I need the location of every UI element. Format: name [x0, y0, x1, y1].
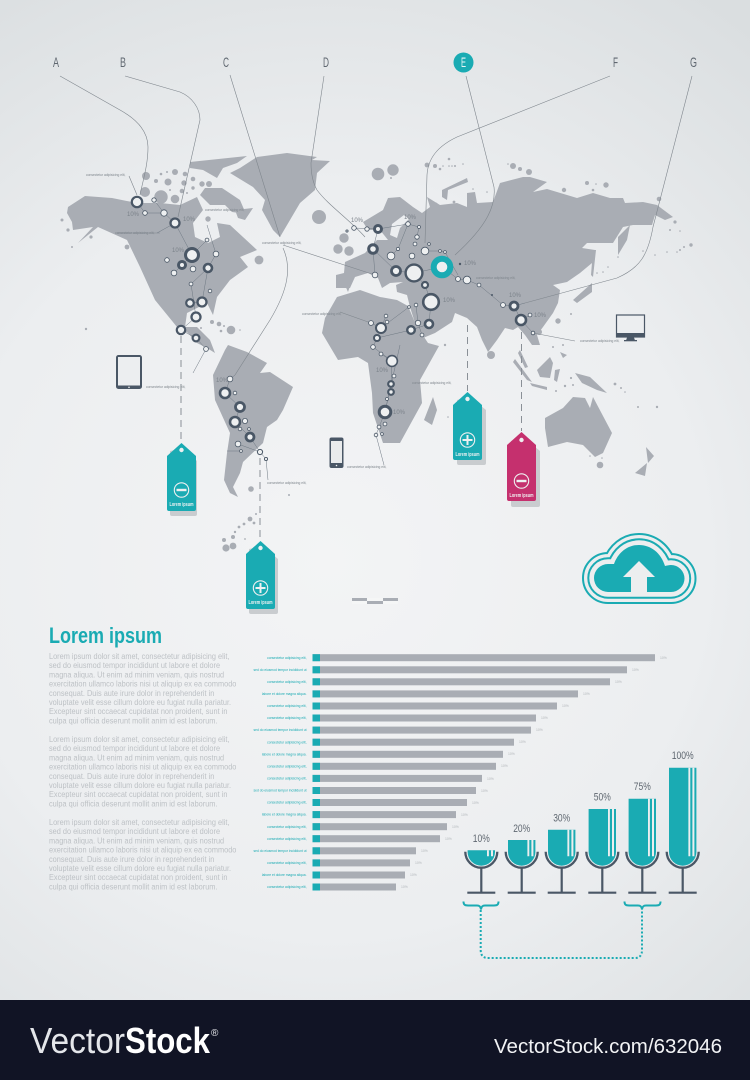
- heading: Lorem ipsum: [49, 623, 162, 648]
- glass chart: [465, 750, 699, 893]
- glass 100%: 100%: [672, 750, 694, 762]
- horizontal bar chart: 10%: [501, 764, 508, 768]
- horizontal bar chart: consectetur adipisicing elit,: [267, 825, 307, 829]
- map labels: consectetur adipisicing elit,: [115, 231, 154, 235]
- network links: [137, 200, 533, 480]
- tag: minus left: [167, 443, 197, 516]
- text block 1: magna aliqua. Ut enim ad minim veniam, quis nostrud: [49, 670, 224, 680]
- tag: minus magenta: [507, 432, 540, 507]
- text block 3: voluptate velit esse cillum dolore eu fugiat nulla pariatur.: [49, 864, 231, 873]
- text block 1: exercitation ullamco laboris nisi ut aliquip ex ea commodo: [49, 679, 237, 689]
- map labels: consectetur adipisicing elit,: [302, 312, 341, 316]
- map labels: 10%: [172, 248, 185, 254]
- leader lines A to G: [60, 75, 692, 375]
- map labels: 10%: [404, 215, 417, 221]
- map labels: 10%: [393, 410, 406, 416]
- scale bar: [352, 598, 398, 604]
- text block 3: magna aliqua. Ut enim ad minim veniam, quis nostrud: [49, 836, 224, 846]
- horizontal bar chart: consectetur adipisicing elit,: [267, 680, 307, 684]
- text block 2: exercitation ullamco laboris nisi ut aliquip ex ea commodo: [49, 762, 237, 772]
- map labels: consectetur adipisicing elit,: [267, 481, 306, 485]
- horizontal bar chart: 10%: [487, 777, 494, 781]
- column letters: D: [323, 54, 329, 70]
- text block 3: consequat. Duis aute irure dolor in reprehenderit in: [49, 854, 214, 864]
- world map: [60, 153, 693, 552]
- text block 2: Lorem ipsum dolor sit amet, consectetur adipisicing elit,: [49, 735, 229, 744]
- map labels: 10%: [376, 368, 389, 374]
- glass 75%: 75%: [634, 781, 651, 793]
- bracket connector: [464, 902, 660, 958]
- horizontal bar chart: consectetur adipisicing elit,: [267, 764, 307, 768]
- horizontal bar chart: sed do eiusmod tempor incididunt ut: [254, 789, 307, 793]
- horizontal bar chart: 10%: [461, 813, 468, 817]
- column letters: [53, 52, 697, 72]
- horizontal bar chart: consectetur adipisicing elit,: [267, 656, 307, 660]
- horizontal bar chart: 10%: [632, 668, 639, 672]
- tag: plus lower: Lorem ipsum: [248, 600, 273, 606]
- horizontal bar chart: [254, 654, 667, 890]
- column letters: A: [53, 54, 59, 70]
- islands of Asia and Madagascar: [344, 178, 630, 425]
- icon: cloud upload: [594, 545, 684, 592]
- text block 1: culpa qui officia deserunt mollit anim id est laborum.: [49, 716, 217, 726]
- horizontal bar chart: 10%: [583, 692, 590, 696]
- Eurasia: [336, 177, 673, 352]
- horizontal bar chart: 10%: [541, 716, 548, 720]
- map labels: 10%: [127, 212, 140, 218]
- glass 10%: 10%: [473, 833, 490, 845]
- North America: [67, 196, 257, 353]
- map labels: consectetur adipisicing elit,: [86, 173, 125, 177]
- horizontal bar chart: 10%: [401, 885, 408, 889]
- horizontal bar chart: consectetur adipisicing elit,: [267, 801, 307, 805]
- horizontal bar chart: sed do eiusmod tempor incididunt ut: [254, 849, 307, 853]
- tag: minus left: Lorem ipsum: [170, 502, 194, 508]
- text block 2: magna aliqua. Ut enim ad minim veniam, quis nostrud: [49, 753, 224, 763]
- horizontal bar chart: consectetur adipisicing elit,: [267, 740, 307, 744]
- highlighted node: [434, 259, 450, 275]
- column letters: F: [613, 54, 618, 70]
- horizontal bar chart: 10%: [519, 740, 526, 744]
- map scatter dots: [60, 158, 693, 552]
- map labels: consectetur adipisicing elit,: [146, 385, 185, 389]
- horizontal bar chart: sed do eiusmod tempor incididunt ut: [254, 668, 307, 672]
- horizontal bar chart: 10%: [536, 728, 543, 732]
- text block 3: exercitation ullamco laboris nisi ut aliquip ex ea commodo: [49, 845, 237, 855]
- text block 2: Excepteur sint occaecat cupidatat non proident, sunt in: [49, 790, 227, 799]
- icon: tablet: [116, 355, 142, 389]
- tag: plus Africa: [453, 392, 486, 465]
- glass 30%: 30%: [553, 812, 570, 824]
- map labels: 10%: [443, 298, 456, 304]
- horizontal bar chart: 10%: [562, 704, 569, 708]
- horizontal bar chart: labore et dolore magna aliqua.: [262, 873, 307, 877]
- South America: [213, 345, 293, 497]
- column letters: G: [690, 54, 697, 70]
- map labels: consectetur adipisicing elit,: [205, 208, 244, 212]
- text block 2: consequat. Duis aute irure dolor in reprehenderit in: [49, 771, 214, 781]
- horizontal bar chart: consectetur adipisicing elit,: [267, 776, 307, 780]
- text block 2: culpa qui officia deserunt mollit anim id est laborum.: [49, 799, 217, 809]
- footer bar: [0, 1000, 750, 1080]
- horizontal bar chart: 10%: [508, 752, 515, 756]
- map labels: [86, 173, 619, 485]
- text block 1: Lorem ipsum dolor sit amet, consectetur adipisicing elit,: [49, 652, 229, 661]
- glass 20%: 20%: [513, 823, 530, 835]
- horizontal bar chart: 10%: [481, 789, 488, 793]
- glass 75%: [626, 781, 658, 893]
- map labels: consectetur adipisicing elit,: [580, 339, 619, 343]
- map labels: 10%: [351, 218, 364, 224]
- horizontal bar chart: consectetur adipisicing elit,: [267, 704, 307, 708]
- column letters: B: [120, 54, 126, 70]
- text block 1: consequat. Duis aute irure dolor in reprehenderit in: [49, 688, 214, 698]
- map labels: 10%: [464, 261, 477, 267]
- tag: minus magenta: Lorem ipsum: [510, 493, 534, 499]
- icon: phone: [330, 438, 344, 468]
- text block 1: Excepteur sint occaecat cupidatat non proident, sunt in: [49, 707, 227, 716]
- horizontal bar chart: 10%: [660, 656, 667, 660]
- map labels: consectetur adipisicing elit,: [476, 276, 515, 280]
- map labels: consectetur adipisicing elit,: [262, 241, 301, 245]
- horizontal bar chart: consectetur adipisicing elit,: [267, 716, 307, 720]
- text block 2: voluptate velit esse cillum dolore eu fugiat nulla pariatur.: [49, 781, 231, 790]
- text block 3: culpa qui officia deserunt mollit anim id est laborum.: [49, 882, 217, 892]
- footer bar: ®: [211, 1028, 219, 1039]
- glass 20%: [506, 823, 538, 893]
- text block 1: sed do eiusmod tempor incididunt ut labore et dolore: [49, 661, 221, 670]
- horizontal bar chart: 10%: [452, 825, 459, 829]
- column letters: C: [223, 54, 229, 70]
- dashed tag connectors: [181, 325, 522, 540]
- text block 3: Excepteur sint occaecat cupidatat non proident, sunt in: [49, 873, 227, 882]
- footer bar: Vector: [30, 1020, 125, 1061]
- horizontal bar chart: 10%: [445, 837, 452, 841]
- tag: plus Africa: Lorem ipsum: [456, 452, 480, 458]
- tag: plus lower: [246, 541, 278, 614]
- map labels: 10%: [534, 313, 547, 319]
- horizontal bar chart: labore et dolore magna aliqua.: [262, 692, 307, 696]
- horizontal bar chart: consectetur adipisicing elit,: [267, 885, 307, 889]
- Australia and New Zealand: [545, 397, 654, 476]
- horizontal bar chart: labore et dolore magna aliqua.: [262, 813, 307, 817]
- horizontal bar chart: labore et dolore magna aliqua.: [262, 752, 307, 756]
- horizontal bar chart: 10%: [415, 861, 422, 865]
- Arctic islands and Greenland: [190, 153, 330, 237]
- glass 50%: [586, 792, 618, 893]
- map labels: consectetur adipisicing elit,: [347, 465, 386, 469]
- map labels: consectetur adipisicing elit,: [412, 381, 451, 385]
- horizontal bar chart: 10%: [472, 801, 479, 805]
- horizontal bar chart: 10%: [410, 873, 417, 877]
- Africa: [322, 290, 439, 443]
- text block 3: Lorem ipsum dolor sit amet, consectetur adipisicing elit,: [49, 818, 229, 827]
- column letters: E: [461, 54, 466, 70]
- glass 30%: [546, 812, 578, 893]
- footer bar: Stock: [125, 1020, 211, 1061]
- horizontal bar chart: consectetur adipisicing elit,: [267, 861, 307, 865]
- horizontal bar chart: 10%: [615, 680, 622, 684]
- text block 1: voluptate velit esse cillum dolore eu fugiat nulla pariatur.: [49, 698, 231, 707]
- glass 10%: [465, 833, 497, 893]
- location nodes: [132, 197, 535, 461]
- footer bar: VectorStock.com/632046: [494, 1036, 722, 1058]
- text block 3: sed do eiusmod tempor incididunt ut labore et dolore: [49, 827, 221, 836]
- horizontal bar chart: sed do eiusmod tempor incididunt ut: [254, 728, 307, 732]
- map labels: 10%: [183, 217, 196, 223]
- horizontal bar chart: consectetur adipisicing elit,: [267, 837, 307, 841]
- horizontal bar chart: 10%: [421, 849, 428, 853]
- map labels: 10%: [216, 378, 229, 384]
- map labels: 10%: [509, 293, 522, 299]
- glass 100%: [667, 750, 699, 893]
- text block 2: sed do eiusmod tempor incididunt ut labore et dolore: [49, 744, 221, 753]
- glass 50%: 50%: [594, 792, 611, 804]
- Baltic Sea: [390, 215, 409, 238]
- icon: monitor: [616, 315, 645, 341]
